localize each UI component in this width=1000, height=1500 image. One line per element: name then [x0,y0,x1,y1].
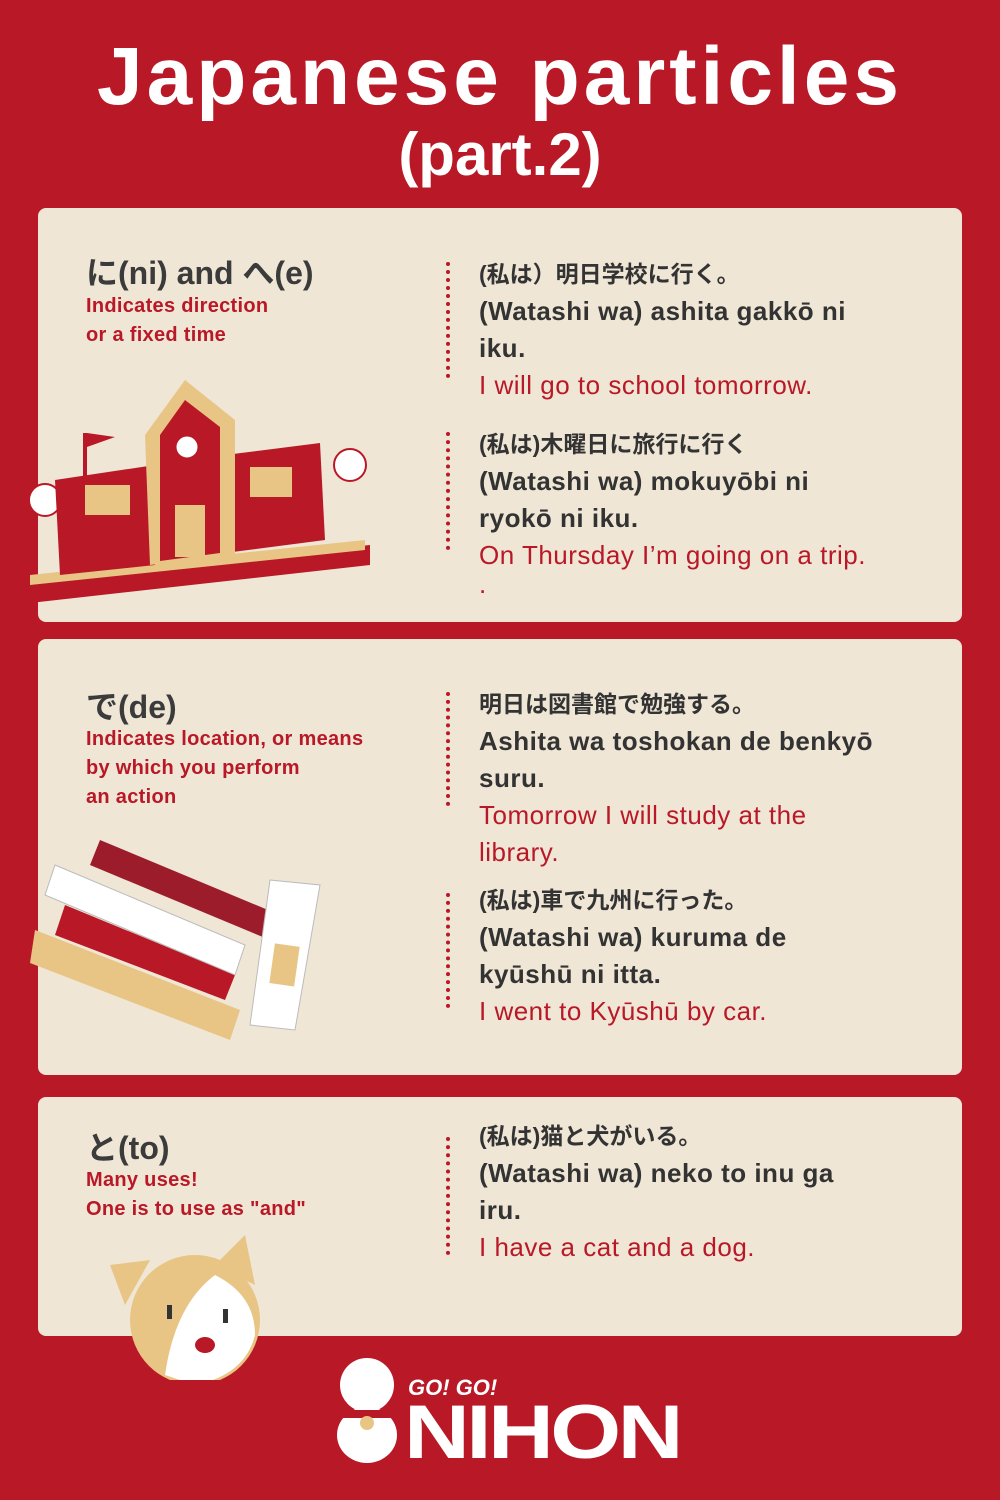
dotted divider [446,692,450,806]
example 4: I went to Kyūshū by car. [479,996,767,1026]
example 4: (私は)車で九州に行った。 [479,887,747,913]
logo: NIHON [404,1390,680,1475]
example 3: library. [479,837,559,867]
dotted divider [446,432,450,550]
example 4: kyūshū ni itta. [479,959,661,989]
example 4 [479,887,787,1026]
icon: school [30,380,370,602]
example 2: ryokō ni iku. [479,503,639,533]
example 1: (Watashi wa) ashita gakkō ni [479,296,846,326]
example 4: (Watashi wa) kuruma de [479,922,787,952]
icon: cat [110,1235,260,1380]
logo text: GO! GO! [408,1375,497,1400]
example 1: I will go to school tomorrow. [479,370,813,400]
description: to: Many uses! [86,1169,198,1191]
description: ni and e: Indicates direction [86,295,268,317]
heading: de: で(de) [86,689,177,725]
description: de: Indicates location, or means [86,728,363,750]
panel: ni and e [38,208,962,622]
example 5: (私は)猫と犬がいる。 [479,1123,701,1149]
icon: books [30,840,320,1040]
example 5: iru. [479,1195,521,1225]
description: to: One is to use as "and" [86,1198,306,1220]
logo [337,1358,680,1475]
example 3 [479,691,873,867]
dotted divider [446,1137,450,1255]
example 1 [479,261,846,400]
example 3: Ashita wa toshokan de benkyō [479,726,873,756]
description: to [86,1169,306,1220]
example 1: (私は）明日学校に行く。 [479,261,740,287]
dotted divider [446,893,450,1008]
description: ni and e: or a fixed time [86,324,226,346]
description: ni and e [86,295,268,346]
panel: de [38,639,962,1075]
example 3: Tomorrow I will study at the [479,800,807,830]
example 3: 明日は図書館で勉強する。 [479,691,755,717]
title: Japanese particles [97,31,903,122]
example 3: suru. [479,763,545,793]
description: de: by which you perform [86,757,300,779]
example 2: . [479,569,487,599]
example 2 [479,431,866,599]
description: de [86,728,363,808]
heading: ni and e: に(ni) and へ(e) [86,255,314,291]
example 2: (Watashi wa) mokuyōbi ni [479,466,809,496]
dotted divider [446,262,450,378]
example 1: iku. [479,333,526,363]
example 5: I have a cat and a dog. [479,1232,755,1262]
example 2: (私は)木曜日に旅行に行く [479,431,747,457]
description: de: an action [86,786,176,808]
example 5: (Watashi wa) neko to inu ga [479,1158,834,1188]
example 2: On Thursday I’m going on a trip. [479,540,866,570]
subtitle: (part.2) [398,121,602,188]
icon: lucky cat [337,1358,397,1463]
panel: to [38,1097,962,1336]
heading: to: と(to) [86,1130,170,1166]
example 5 [479,1123,834,1262]
